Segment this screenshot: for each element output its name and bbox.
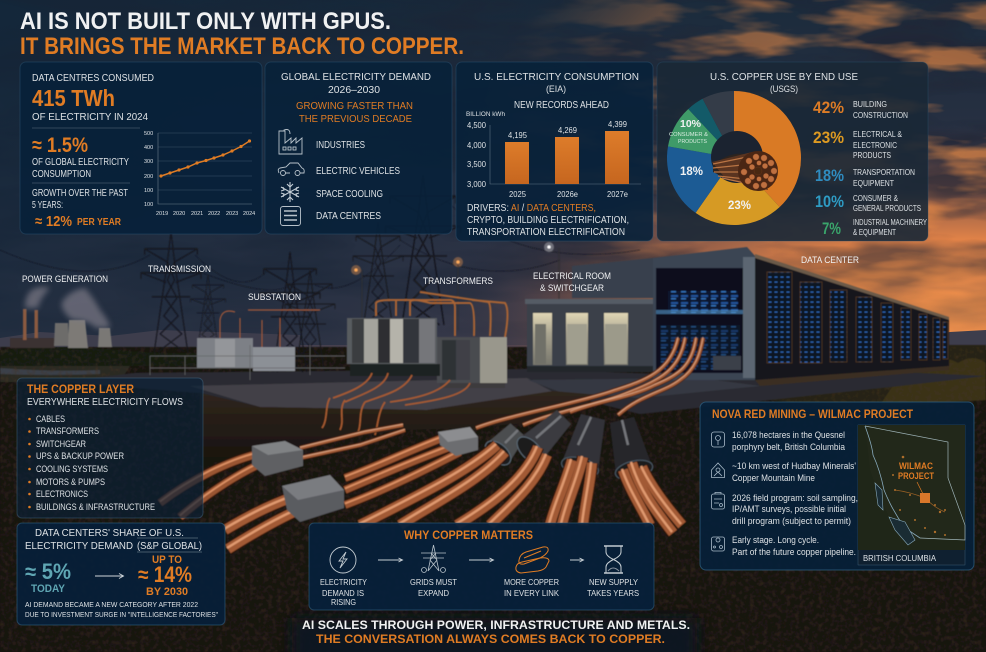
panel: why copper matters: IN EVERY LINK [504, 588, 559, 598]
closing statement: AI SCALES THROUGH POWER, INFRASTRUCTURE AND METALS. [302, 618, 690, 632]
panel: Nova Red Mining Wilmac project: IP/AMT surveys, possible initial [732, 504, 846, 514]
icon: field program clipboard [712, 492, 724, 509]
legend: end uses: 23% [813, 128, 844, 147]
panel: U.S. electricity consumption: NEW RECORDS AHEAD [514, 100, 609, 111]
panel: U.S. copper use by end use: U.S. COPPER USE BY END USE [710, 72, 858, 83]
line chart: data centre consumption 2019–2024: 2023 [226, 211, 238, 217]
panel: the copper layer: THE COPPER LAYER [27, 382, 134, 396]
line chart: data centre consumption 2019–2024: 2024 [243, 211, 255, 217]
list: where copper is used: BUILDINGS & INFRASTRUCTURE [36, 502, 155, 512]
panel: Nova Red Mining Wilmac project: 16,078 hectares in the Quesnel [732, 430, 845, 440]
legend: end uses: 18% [815, 166, 844, 185]
icon: transmission tower [421, 545, 446, 572]
bar chart: 4,269 [558, 125, 577, 135]
panel: Nova Red Mining Wilmac project: porphyry belt, British Columbia [732, 442, 845, 452]
bar chart: 2025 [509, 189, 526, 199]
panel: why copper matters: DEMAND IS [322, 588, 364, 598]
donut chart: 23% [728, 198, 751, 212]
icon: hourglass [604, 546, 623, 573]
list: where copper is used: MOTORS & PUMPS [36, 477, 105, 487]
list: where copper is used: UPS & BACKUP POWER [36, 451, 124, 461]
panel: data centers' share of U.S. electricity demand: BY 2030 [146, 586, 188, 598]
panel: data centres consumed: OF ELECTRICITY IN 2024 [32, 112, 148, 123]
panel: Nova Red Mining Wilmac project [700, 402, 974, 570]
substation equipment [197, 338, 253, 368]
supply chain stage labels: DATA CENTER [801, 255, 859, 265]
panel: data centers' share of U.S. electricity demand: UP TO [152, 554, 182, 566]
bar chart: 4,500 [467, 120, 486, 130]
bar chart: 4,000 [467, 140, 486, 150]
icon: location [712, 432, 724, 447]
arrow [570, 558, 584, 562]
panel: why copper matters: TAKES YEARS [587, 588, 639, 598]
donut chart: 18% [680, 164, 703, 178]
donut chart: PRODUCTS [678, 139, 708, 145]
panel: global electricity demand: 2026–2030 [328, 85, 380, 96]
icon: mine [712, 463, 724, 478]
legend: end uses: 10% [815, 192, 844, 211]
line chart: data centre consumption 2019–2024: 100 [144, 188, 153, 194]
line chart: data centre consumption 2019–2024: 100 [144, 202, 153, 208]
panel: data centres consumed: 415 TWh [32, 85, 115, 111]
bottom dark band behind the closing lines [292, 618, 697, 652]
supply chain stage labels: ELECTRICAL ROOM [533, 271, 611, 281]
panel: Nova Red Mining Wilmac project: Copper Mountain Mine [732, 473, 815, 483]
panel: U.S. electricity consumption: DRIVERS: AI / DATA CENTERS, [467, 203, 596, 214]
bar chart: 4,399 [608, 119, 627, 129]
panel: why copper matters: NEW SUPPLY [589, 577, 638, 587]
panel: data centers' share of U.S. electricity demand: DATA CENTERS' SHARE OF U.S. [35, 528, 184, 539]
list: where copper is used: SWITCHGEAR [36, 439, 86, 449]
list: where copper is used: CABLES [36, 414, 65, 424]
legend: end uses: TRANSPORTATION [853, 168, 915, 177]
panel: global electricity demand: DATA CENTRES [316, 211, 381, 222]
supply chain stage labels: & SWITCHGEAR [540, 283, 604, 293]
legend: end uses: ELECTRONIC [853, 141, 897, 150]
title [20, 8, 464, 60]
legend: end uses: 7% [822, 219, 841, 238]
panel: global electricity demand: INDUSTRIES [316, 140, 365, 151]
panel: why copper matters: GRIDS MUST [410, 577, 457, 587]
panel: data centres consumed: 5 YEARS: [32, 200, 63, 211]
panel: data centers' share of U.S. electricity demand [17, 523, 225, 625]
panel: U.S. electricity consumption: U.S. ELECTRICITY CONSUMPTION [474, 72, 639, 83]
supply chain stage labels: SUBSTATION [248, 292, 301, 302]
panel: Nova Red Mining Wilmac project: Part of the future copper pipeline. [732, 547, 856, 557]
panel: data centers' share of U.S. electricity demand: AI DEMAND BECAME A NEW CATEGORY AFTER 2022 [25, 602, 198, 609]
list: where copper is used: TRANSFORMERS [36, 426, 99, 436]
legend: end uses: CONSUMER & [853, 194, 899, 203]
panel: why copper matters: EXPAND [418, 588, 449, 598]
arrow: today to 2030 [95, 574, 124, 578]
panel: Nova Red Mining Wilmac project: ~10 km west of Hudbay Minerals' [732, 461, 856, 471]
arrow [378, 558, 402, 562]
panel: U.S. electricity consumption: BILLION kWh [466, 111, 505, 118]
panel: global electricity demand: ELECTRIC VEHICLES [316, 166, 400, 177]
line chart: data centre consumption 2019–2024: 200 [144, 174, 153, 180]
panel: the copper layer: EVERYWHERE ELECTRICITY FLOWS [27, 397, 183, 408]
map: British Columbia [858, 425, 965, 565]
list: where copper is used: ELECTRONICS [36, 489, 88, 499]
panel: U.S. electricity consumption [456, 62, 653, 241]
bar chart: 2027e [607, 189, 628, 199]
line chart: data centre consumption 2019–2024 [144, 131, 255, 217]
legend: end uses: GENERAL PRODUCTS [853, 204, 921, 213]
bar chart: 3,000 [467, 179, 486, 189]
list: where copper is used [28, 414, 155, 512]
panel: Nova Red Mining Wilmac project: 2026 field program: soil sampling, [732, 493, 858, 503]
line chart: data centre consumption 2019–2024: 2019 [156, 211, 168, 217]
panel: Nova Red Mining Wilmac project: NOVA RED MINING – WILMAC PROJECT [712, 407, 914, 421]
cable sleeves [487, 423, 526, 463]
line chart: data centre consumption 2019–2024: 400 [144, 145, 153, 151]
panel: U.S. electricity consumption: (EIA) [546, 84, 566, 94]
panel: data centres consumed: OF GLOBAL ELECTRICITY [32, 157, 129, 168]
legend: end uses: & EQUIPMENT [853, 228, 896, 237]
line chart: data centre consumption 2019–2024: 2021 [191, 211, 203, 217]
data center rack hall [755, 256, 949, 380]
panel: global electricity demand: GROWING FASTER THAN [296, 101, 413, 112]
panel: data centers' share of U.S. electricity demand: ≈ 5% [25, 559, 71, 584]
transformers [347, 318, 437, 364]
panel: Nova Red Mining Wilmac project: Early stage. Long cycle. [732, 535, 819, 545]
title: IT BRINGS THE MARKET BACK TO COPPER. [20, 33, 464, 60]
panel: U.S. copper use by end use [657, 62, 928, 241]
electrical room [572, 258, 653, 298]
power plant [10, 338, 55, 348]
icon: lightning bolt [330, 547, 356, 573]
map: British Columbia: PROJECT [898, 471, 934, 481]
line chart: data centre consumption 2019–2024: 500 [144, 131, 153, 137]
tree line and ground [0, 175, 986, 652]
legend: end uses [813, 98, 927, 238]
panel: the copper layer [17, 378, 203, 518]
legend: end uses: BUILDING [853, 100, 887, 109]
pylons [0, 175, 640, 372]
panel: data centres consumed: PER YEAR [77, 217, 122, 228]
icon: factory [279, 130, 302, 154]
bar chart [467, 119, 641, 199]
panel: why copper matters [309, 523, 654, 610]
panel: U.S. electricity consumption: CRYPTO, BUILDING ELECTRIFICATION, [467, 215, 629, 226]
map: British Columbia: BRITISH COLUMBIA [863, 553, 936, 563]
panel: U.S. electricity consumption: TRANSPORTATION ELECTRIFICATION [467, 227, 625, 238]
donut chart: CONSUMER & [669, 132, 709, 138]
list: where copper is used: COOLING SYSTEMS [36, 464, 108, 474]
panel: global electricity demand: THE PREVIOUS DECADE [299, 114, 412, 125]
supply chain stage labels: TRANSFORMERS [423, 276, 493, 286]
lamp glows [354, 268, 358, 272]
panel: data centers' share of U.S. electricity demand: DUE TO INVESTMENT SURGE IN "INTELLIGENCE FACTORIES" [25, 612, 218, 619]
bar chart: 3,500 [467, 159, 486, 169]
panel: why copper matters: WHY COPPER MATTERS [404, 528, 533, 542]
panel: data centres consumed: ≈ 1.5% [32, 134, 88, 157]
map: British Columbia: WILMAC [899, 461, 933, 471]
panel: why copper matters: ELECTRICITY [320, 577, 367, 587]
panel: why copper matters: RISING [331, 597, 356, 607]
icon: copper ingots [516, 547, 549, 573]
far cables [322, 373, 470, 435]
closing statement [302, 618, 690, 646]
trench wall [200, 391, 600, 465]
panel: Nova Red Mining Wilmac project: drill program (subject to permit) [732, 516, 851, 526]
panel: why copper matters: MORE COPPER [504, 577, 559, 587]
bar chart: 4,195 [508, 130, 527, 140]
line chart: data centre consumption 2019–2024: 300 [144, 159, 153, 165]
distant hills [0, 330, 986, 350]
line chart: data centre consumption 2019–2024: 2022 [208, 211, 220, 217]
panel: global electricity demand: SPACE COOLING [316, 189, 383, 200]
panel: data centers' share of U.S. electricity demand: ≈ 14% [138, 562, 192, 587]
legend: end uses: PRODUCTS [853, 151, 891, 160]
icon: electric car [278, 163, 304, 176]
panel: data centers' share of U.S. electricity demand: ELECTRICITY DEMAND [25, 541, 133, 552]
near cables [225, 445, 682, 549]
panel: data centres consumed: CONSUMPTION [32, 169, 91, 180]
legend: end uses: 42% [813, 98, 844, 117]
legend: end uses: ELECTRICAL & [853, 130, 903, 139]
data center main block [653, 247, 756, 380]
arrow [469, 558, 494, 562]
icon: pipeline stages [712, 537, 724, 551]
connector boxes [252, 441, 303, 476]
panel: global electricity demand: GLOBAL ELECTRICITY DEMAND [281, 72, 431, 83]
donut chart: 10% [680, 119, 701, 130]
title: AI IS NOT BUILT ONLY WITH GPUS. [20, 8, 391, 35]
panel: data centres consumed: ≈ 12% [35, 213, 72, 230]
icon: snowflake [281, 182, 299, 202]
panel: global electricity demand [265, 62, 452, 234]
supply chain stage labels [22, 255, 859, 302]
supply chain stage labels: POWER GENERATION [22, 274, 108, 284]
panel: data centers' share of U.S. electricity demand: (S&P GLOBAL) [137, 541, 202, 552]
closing statement: THE CONVERSATION ALWAYS COMES BACK TO COPPER. [316, 632, 665, 646]
panel: U.S. copper use by end use: (USGS) [770, 84, 798, 94]
panel: data centres consumed: GROWTH OVER THE PAST [32, 188, 128, 199]
bar chart: 2026e [557, 189, 578, 199]
supply chain stage labels: TRANSMISSION [148, 264, 211, 274]
legend: end uses: INDUSTRIAL MACHINERY [853, 218, 927, 227]
legend: end uses: CONSTRUCTION [853, 111, 908, 120]
icon: server rack [280, 206, 300, 226]
panel: data centres consumed [20, 62, 262, 234]
legend: end uses: EQUIPMENT [853, 179, 894, 188]
panel: data centres consumed: DATA CENTRES CONSUMED [32, 73, 154, 84]
donut chart [667, 91, 801, 225]
panel: data centers' share of U.S. electricity demand: TODAY [31, 583, 66, 595]
line chart: data centre consumption 2019–2024: 2020 [173, 211, 185, 217]
icon: copper strand bundle [712, 151, 778, 191]
